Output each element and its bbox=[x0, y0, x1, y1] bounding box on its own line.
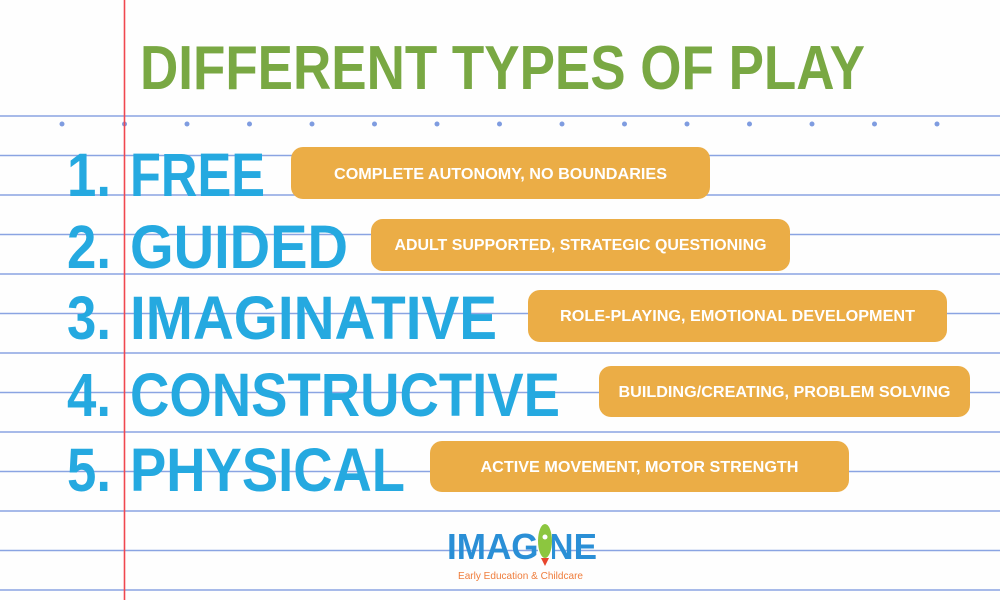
item 3: imaginative: ROLE-PLAYING, EMOTIONAL DEVELOPMENT bbox=[560, 308, 915, 325]
item 1: free bbox=[67, 141, 710, 209]
item 4: constructive: CONSTRUCTIVE bbox=[130, 361, 560, 429]
item 1: free: COMPLETE AUTONOMY, NO BOUNDARIES bbox=[334, 166, 667, 183]
logo: Early Education & Childcare bbox=[458, 570, 583, 582]
item 4: constructive: 4. bbox=[67, 361, 111, 429]
item 2: guided: GUIDED bbox=[130, 213, 348, 281]
item 3: imaginative: 3. bbox=[67, 284, 111, 352]
item 5: physical: PHYSICAL bbox=[130, 436, 405, 504]
item 2: guided: ADULT SUPPORTED, STRATEGIC QUESTIONING bbox=[394, 237, 766, 254]
item 2: guided bbox=[67, 213, 790, 281]
item 5: physical: ACTIVE MOVEMENT, MOTOR STRENGTH bbox=[480, 459, 798, 476]
item 3: imaginative bbox=[67, 284, 947, 352]
item 5: physical: 5. bbox=[67, 436, 111, 504]
item 4: constructive bbox=[67, 361, 970, 429]
item 1: free: FREE bbox=[130, 141, 265, 209]
logo: IMAGINE bbox=[447, 526, 597, 567]
item 4: constructive: BUILDING/CREATING, PROBLEM SOLVING bbox=[618, 384, 950, 401]
item 5: physical bbox=[67, 436, 849, 504]
logo bbox=[447, 524, 597, 582]
item 3: imaginative: IMAGINATIVE bbox=[130, 284, 497, 352]
item 1: free: 1. bbox=[67, 141, 111, 209]
icon: rocket bbox=[538, 524, 552, 566]
title: DIFFERENT TYPES OF PLAY bbox=[140, 34, 865, 103]
item 2: guided: 2. bbox=[67, 213, 111, 281]
